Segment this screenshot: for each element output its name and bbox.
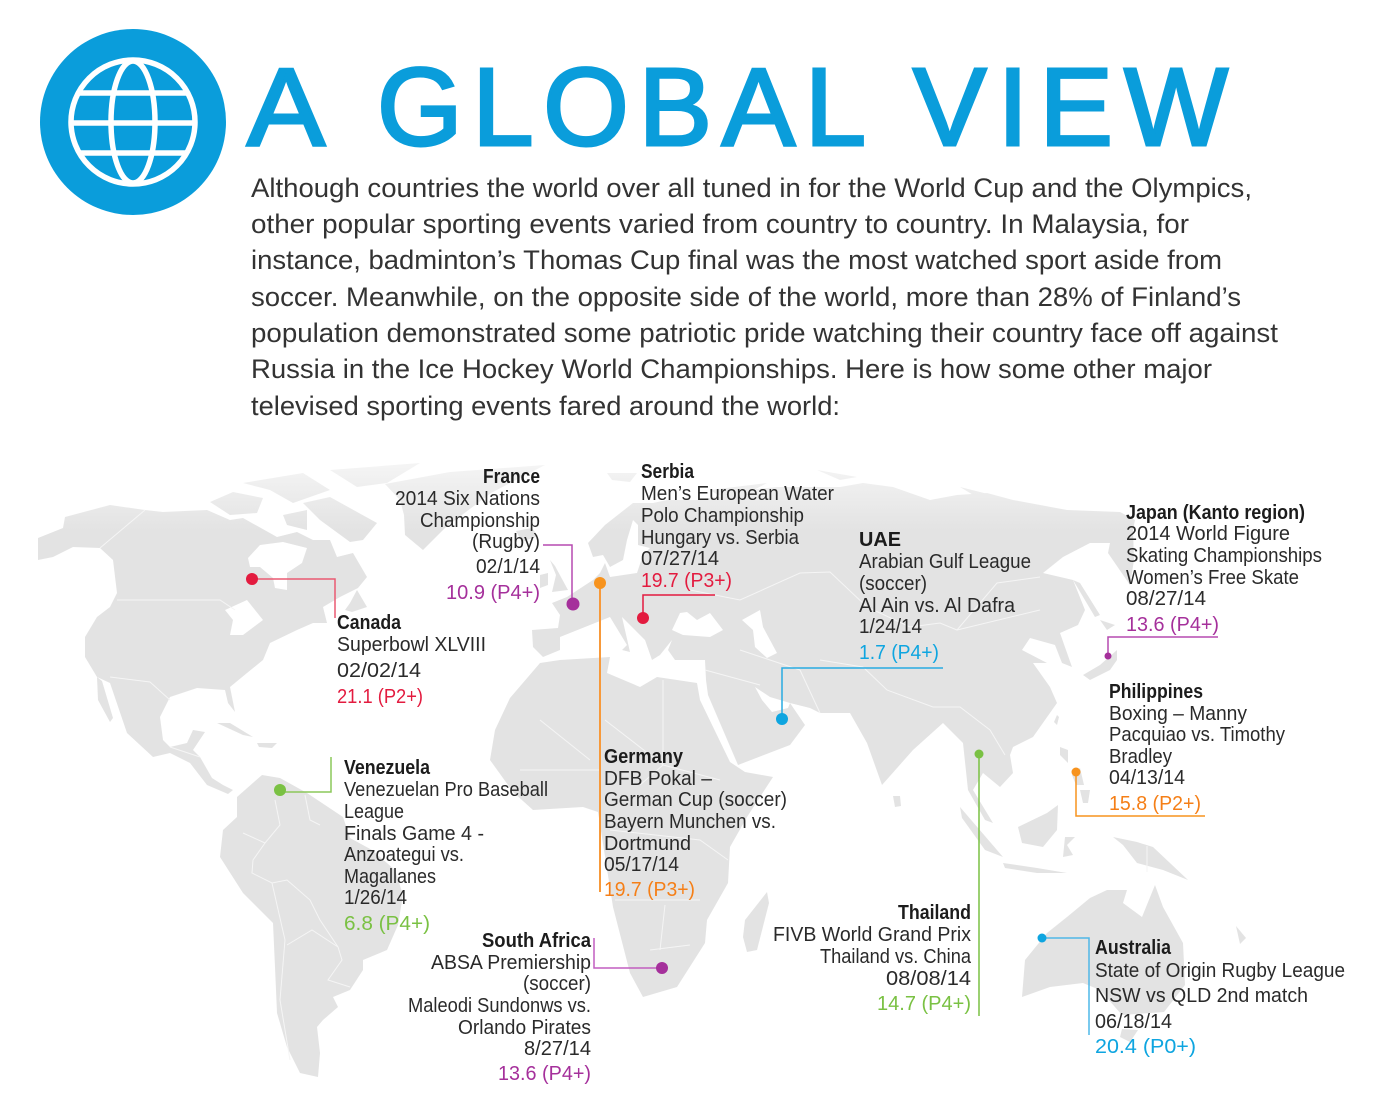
callout: Japan: Japan (Kanto region): [1126, 502, 1305, 524]
callout: France: Championship: [420, 510, 540, 532]
callout: Japan: 13.6 (P4+): [1126, 614, 1219, 636]
callout: South Africa: Maleodi Sundonws vs.: [408, 995, 591, 1017]
callout: Serbia: Polo Championship: [641, 505, 804, 527]
callout: South Africa: South Africa: [482, 930, 592, 952]
callout: Canada: [246, 573, 486, 708]
callout: Serbia: [637, 461, 834, 624]
callout: Australia: Australia: [1095, 937, 1172, 959]
callout: France: 02/1/14: [476, 556, 540, 578]
intro text block: Russia in the Ice Hockey World Championships. Here is how some other major: [251, 354, 1212, 384]
callout: Serbia: Hungary vs. Serbia: [641, 527, 800, 549]
title: [247, 46, 1228, 169]
callout: Japan: Skating Championships: [1126, 545, 1322, 567]
callout: Australia: 20.4 (P0+): [1095, 1036, 1196, 1058]
callout: Serbia: Men’s European Water: [641, 483, 834, 505]
callout: Germany: Bayern Munchen vs.: [604, 811, 776, 833]
callout: UAE: Arabian Gulf League: [859, 551, 1031, 573]
callout: Canada: 21.1 (P2+): [337, 686, 423, 708]
callout: Germany: [594, 577, 787, 901]
callout: Thailand: 14.7 (P4+): [877, 993, 971, 1015]
title: A: [247, 46, 326, 169]
callout: Germany: Dortmund: [604, 833, 691, 855]
callout: Germany: 19.7 (P3+): [604, 879, 695, 901]
callout: South Africa: (soccer): [523, 973, 591, 995]
intro text block: instance, badminton’s Thomas Cup final was the most watched sport aside from: [251, 245, 1222, 275]
callout: South Africa: Orlando Pirates: [458, 1017, 591, 1039]
callout: Venezuela: League: [344, 801, 404, 823]
callout: Venezuela: Venezuela: [344, 757, 431, 779]
intro text block: population demonstrated some patriotic pride watching their country face off against: [251, 318, 1278, 348]
callout: Venezuela: 1/26/14: [344, 887, 407, 909]
callout: Japan: 08/27/14: [1126, 588, 1206, 610]
callout: France: (Rugby): [472, 531, 540, 553]
callout: Australia: 06/18/14: [1095, 1011, 1172, 1033]
callout: Serbia: 19.7 (P3+): [641, 570, 732, 592]
callout: Canada: Superbowl XLVIII: [337, 634, 486, 656]
callout: UAE: 1.7 (P4+): [859, 642, 939, 664]
callout: Thailand: FIVB World Grand Prix: [773, 924, 971, 946]
callout: Thailand: [773, 750, 984, 1016]
callout: Canada: 02/02/14: [337, 660, 421, 682]
icon: globe: [40, 29, 226, 215]
callout: Philippines: Bradley: [1109, 746, 1172, 768]
intro text block: [251, 173, 1278, 421]
world map: [38, 463, 1246, 1077]
callout: Venezuela: Magallanes: [344, 866, 436, 888]
intro text block: soccer. Meanwhile, on the opposite side of the world, more than 28% of Finland’s: [251, 282, 1241, 312]
callout: Venezuela: Venezuelan Pro Baseball: [344, 779, 548, 801]
callout: Philippines: 15.8 (P2+): [1109, 793, 1201, 815]
callout: UAE: [776, 529, 1031, 725]
callout: Germany: 05/17/14: [604, 854, 679, 876]
callout: Thailand: Thailand vs. China: [820, 946, 972, 968]
callout: Venezuela: [274, 757, 548, 935]
callout: France: [395, 466, 580, 610]
callout: Australia: State of Origin Rugby League: [1095, 960, 1345, 982]
title: VIEW: [913, 46, 1228, 169]
callout: UAE: (soccer): [859, 573, 927, 595]
callout: Thailand: 08/08/14: [886, 968, 971, 990]
callout: South Africa: 13.6 (P4+): [498, 1063, 591, 1085]
callout: South Africa: ABSA Premiership: [431, 952, 591, 974]
callout: Philippines: Philippines: [1109, 681, 1203, 703]
callout: Japan: 2014 World Figure: [1126, 523, 1290, 545]
intro text block: other popular sporting events varied from country to country. In Malaysia, for: [251, 209, 1189, 239]
callout: Thailand: Thailand: [898, 902, 971, 924]
callout: UAE: UAE: [859, 529, 901, 551]
callout: France: 10.9 (P4+): [446, 582, 540, 604]
callout: Venezuela: 6.8 (P4+): [344, 913, 430, 935]
callout: Philippines: Boxing – Manny: [1109, 703, 1247, 725]
intro text block: televised sporting events fared around the world:: [251, 391, 840, 421]
callout: UAE: Al Ain vs. Al Dafra: [859, 595, 1016, 617]
callout: Germany: German Cup (soccer): [604, 789, 787, 811]
callout: Germany: Germany: [604, 746, 684, 768]
callout: Australia: NSW vs QLD 2nd match: [1095, 985, 1308, 1007]
intro text block: Although countries the world over all tuned in for the World Cup and the Olympics,: [251, 173, 1252, 203]
callout: Australia: [1038, 934, 1345, 1058]
callout: Germany: DFB Pokal –: [604, 768, 713, 790]
callout: Venezuela: Anzoategui vs.: [344, 844, 464, 866]
callout: Japan: [1104, 502, 1322, 660]
callout: Philippines: Pacquiao vs. Timothy: [1109, 724, 1285, 746]
callout: Serbia: Serbia: [641, 461, 695, 483]
callout: France: France: [483, 466, 540, 488]
callout: South Africa: 8/27/14: [524, 1038, 591, 1060]
callout: Venezuela: Finals Game 4 -: [344, 823, 484, 845]
callout: Canada: Canada: [337, 612, 402, 634]
callout: UAE: 1/24/14: [859, 616, 922, 638]
callout: Philippines: 04/13/14: [1109, 767, 1185, 789]
callout: Philippines: [1072, 681, 1285, 816]
callout: South Africa: [408, 930, 668, 1085]
callout: Serbia: 07/27/14: [641, 548, 719, 570]
callout: Japan: Women’s Free Skate: [1126, 567, 1299, 589]
title: GLOBAL: [377, 46, 866, 169]
callout: France: 2014 Six Nations: [395, 488, 540, 510]
